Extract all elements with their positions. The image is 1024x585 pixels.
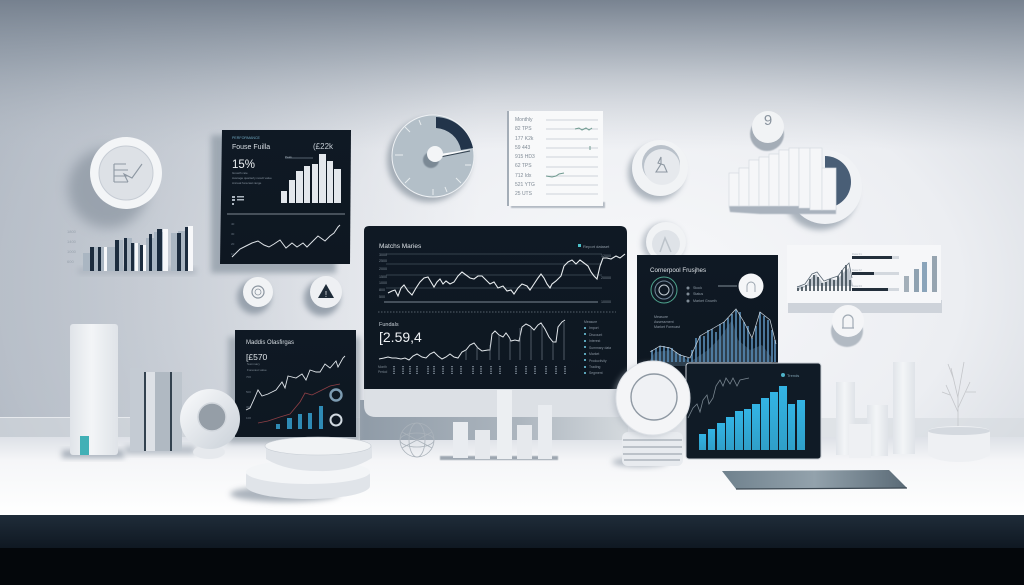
panel: top-left dark dashboard: Peak xyxy=(285,155,292,159)
panel: monitor: 500 xyxy=(379,295,385,299)
panel: white chart card xyxy=(787,245,942,313)
icon: desk discs xyxy=(230,437,372,502)
icon: fingerprint knob xyxy=(237,277,273,314)
dark desk pad xyxy=(722,470,907,489)
panel: monitor: Matchs Maries xyxy=(379,243,422,250)
panel: top-left dark dashboard: 30 xyxy=(231,232,235,236)
panel: right dark dashboard: Measure xyxy=(654,315,668,319)
panel: monitor: Fundals xyxy=(379,322,399,328)
panel: right dark dashboard: Stock xyxy=(693,286,702,290)
panel: monitor: Productivity xyxy=(589,359,607,363)
panel: monitor: 2000 xyxy=(379,267,387,271)
panel: paper table: 915 HD3 xyxy=(515,154,535,160)
bar chart: wall bars left: 600 xyxy=(67,259,74,264)
panel: paper table xyxy=(507,111,605,208)
panel: top-left dark dashboard xyxy=(211,130,351,273)
panel: paper table: 82 TPS xyxy=(515,126,532,132)
bar chart: wall bars left: 1800 xyxy=(67,229,77,234)
panel: monitor: [2.59,4 xyxy=(379,329,422,345)
icon: stacked discs xyxy=(612,432,683,467)
icon: warning knob: ! xyxy=(325,290,327,299)
panel: lower-left dark dashboard: 700 xyxy=(246,375,251,379)
tablet xyxy=(686,363,821,459)
panel: lower-left dark dashboard: Summary xyxy=(247,362,260,366)
icon: wire sphere xyxy=(400,423,434,457)
bar chart: wall bars left: 1400 xyxy=(67,239,77,244)
panel: monitor: 10000 xyxy=(601,300,611,304)
panel: monitor: Market xyxy=(589,352,599,356)
icon: dial with chart xyxy=(68,137,162,228)
panel: paper table: 25 UTS xyxy=(515,191,533,197)
panel: monitor: Report dataset xyxy=(583,244,610,249)
panel: paper table: Monthly xyxy=(515,117,533,123)
icon: ring sphere xyxy=(180,389,240,459)
panel: monitor: Summary data xyxy=(589,346,611,350)
icon: round knob with figure xyxy=(628,140,688,201)
panel: monitor: Import xyxy=(589,326,599,330)
panel: lower-left dark dashboard: Forecast value xyxy=(247,368,267,372)
panel: paper table: 177 K2k xyxy=(515,136,534,142)
white columns right xyxy=(836,362,915,458)
panel: top-left dark dashboard: 15% xyxy=(232,159,255,171)
panel: white chart card: Data 01 xyxy=(852,252,862,256)
panel: right dark dashboard: Market Growth xyxy=(693,299,717,303)
panel: right dark dashboard: Status xyxy=(693,292,703,296)
panel: paper table: 59 443 xyxy=(515,145,531,151)
panel: lower-left dark dashboard: Maddis Olasfirgas xyxy=(246,340,294,346)
panel: monitor: Measure xyxy=(584,320,597,324)
panel: monitor: 2500 xyxy=(379,259,387,263)
background wall xyxy=(0,0,1024,440)
panel: top-left dark dashboard: Fouse Fuilla xyxy=(232,144,270,151)
tablet: Trends xyxy=(787,373,799,378)
panel: top-left dark dashboard: Growth rate xyxy=(232,171,248,175)
panel: top-left dark dashboard: (£22k xyxy=(313,142,334,151)
panel: top-left dark dashboard: PERFORMANCE xyxy=(232,136,261,140)
panel: lower-left dark dashboard: 300 xyxy=(246,405,251,409)
panel: right dark dashboard: Market Forecast xyxy=(654,325,680,329)
panel: right dark dashboard: Cornerpool Frusjhes xyxy=(650,267,706,274)
panel: lower-left dark dashboard: 500 xyxy=(246,390,251,394)
panel: monitor: 1000 xyxy=(379,281,387,285)
panel: monitor: Discount xyxy=(589,333,602,337)
panel: lower-left dark dashboard: [£570 xyxy=(246,352,268,362)
panel: monitor: 12000 xyxy=(601,254,611,258)
panel: monitor: Month xyxy=(378,365,387,369)
panel: paper table: 521 YTG xyxy=(515,182,535,188)
panel: monitor xyxy=(360,226,628,440)
panel: monitor: Segment xyxy=(589,371,603,375)
small white column chart xyxy=(440,390,558,460)
icon: small knob with letter xyxy=(750,111,784,151)
panel: lower-left dark dashboard: 100 xyxy=(246,416,251,420)
icon: potted tree xyxy=(928,362,990,462)
panel: monitor: 1500 xyxy=(379,275,387,279)
panel: top-left dark dashboard: 10 xyxy=(231,252,235,256)
panel: top-left dark dashboard: 20 xyxy=(231,242,235,246)
panel: monitor: 800 xyxy=(379,288,385,292)
icon: lock knob xyxy=(831,305,864,347)
panel: white chart card: Data 03 xyxy=(852,284,862,288)
panel: lower-left dark dashboard xyxy=(228,330,360,443)
icon: large plate xyxy=(613,361,690,437)
panel: paper table: 62 TPS xyxy=(515,163,532,169)
panel: monitor: Trading xyxy=(589,365,600,369)
panel: monitor: 3000 xyxy=(379,253,387,257)
panel: white chart card: Data 02 xyxy=(852,268,862,272)
icon: gauge xyxy=(387,115,474,202)
icon: small knob with letter: 9 xyxy=(764,112,772,129)
icon: tall cylinder xyxy=(62,324,124,458)
panel: right dark dashboard xyxy=(637,255,778,380)
icon: book stack xyxy=(125,368,195,454)
icon: warning knob xyxy=(304,276,342,316)
panel: top-left dark dashboard: Annual forecast range xyxy=(232,181,262,185)
panel: top-left dark dashboard: Average quarterly result value xyxy=(232,176,272,180)
bar chart: wall bars left xyxy=(67,226,196,274)
icon: white ring and stepped bars xyxy=(729,148,862,230)
desk xyxy=(0,437,1024,585)
panel: top-left dark dashboard: 40 xyxy=(231,222,235,226)
panel: monitor: 20000 xyxy=(601,276,611,280)
icon: knob behind monitor xyxy=(642,222,686,265)
panel: monitor: Interest xyxy=(589,339,600,343)
panel: right dark dashboard: Assessment xyxy=(654,320,674,324)
bar chart: wall bars left: 1000 xyxy=(67,249,77,254)
panel: paper table: 712 Idx xyxy=(515,173,532,179)
panel: monitor: Period xyxy=(378,370,387,374)
